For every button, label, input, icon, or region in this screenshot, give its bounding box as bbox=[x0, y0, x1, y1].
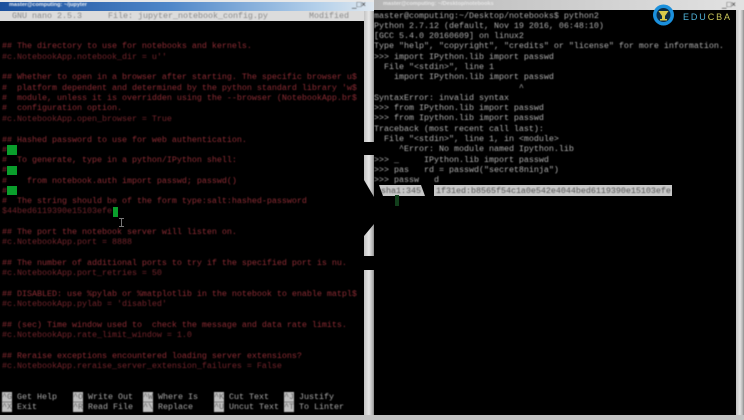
config file text: $44bed6119390e15103efe bbox=[2, 206, 112, 216]
config file text: ## Reraise exceptions encountered loading server extensions? bbox=[2, 351, 302, 361]
nano shortcut menu: ^U bbox=[214, 402, 224, 412]
python session text: import IPython.lib import passwd bbox=[394, 72, 554, 82]
panel: right terminal window bbox=[374, 0, 744, 415]
python session text: >>> import IPython.lib import passwd bbox=[374, 52, 554, 62]
nano shortcut menu: Get Help bbox=[17, 392, 57, 402]
nano shortcut menu: ^K bbox=[214, 392, 224, 402]
python session text: Type "help", "copyright", "credits" or "license" for more information. bbox=[374, 41, 724, 51]
config file text bbox=[2, 41, 358, 371]
python session text: File "<stdin>", line 1 bbox=[384, 62, 494, 72]
config file text: ## Whether to open in a browser after starting. The specific browser u$ bbox=[2, 72, 357, 82]
nano shortcut menu: Read File bbox=[88, 402, 133, 412]
config file text: ## DISABLED: use %pylab or %matplotlib in the notebook to enable matpl$ bbox=[2, 289, 357, 299]
python session text: master@computing:~/Desktop/notebooks$ python2 bbox=[374, 11, 599, 21]
highlighted password hash: sha1:345 1f31ed:b8565f54c1a0e542e4044bed6119390e15103efe bbox=[381, 186, 671, 196]
nano header bar: Modified bbox=[309, 11, 349, 21]
nano header bar bbox=[0, 11, 364, 21]
python session text: SyntaxError: invalid syntax bbox=[374, 93, 509, 103]
config file text: # The string should be of the form type:salt:hashed-password bbox=[2, 196, 307, 206]
config file text: #c.NotebookApp.rate_limit_window = 1.0 bbox=[2, 330, 192, 340]
nano shortcut menu: ^\ bbox=[143, 402, 153, 412]
python session text: File "<stdin>", line 1, in <module> bbox=[384, 134, 559, 144]
config file text: #c.NotebookApp.reraise_server_extension_failures = False bbox=[2, 361, 282, 371]
right title bar: _□× bbox=[722, 0, 736, 9]
nano shortcut menu: Justify bbox=[299, 392, 334, 402]
nano shortcut menu: Write Out bbox=[88, 392, 133, 402]
bottom window edge bbox=[0, 415, 744, 420]
nano shortcut menu: Exit bbox=[17, 402, 37, 412]
python session text: ^Error: No module named Ipython.lib bbox=[399, 144, 574, 154]
right title bar: master@computing: ~/Desktop/notebooks bbox=[383, 1, 494, 7]
python session text: ^ bbox=[519, 83, 524, 93]
config file text: # bbox=[2, 186, 7, 196]
nano shortcut menu: ^X bbox=[2, 402, 12, 412]
python session text: Python 2.7.12 (default, Nov 19 2016, 06:48:10) bbox=[374, 21, 604, 31]
left window scrollbar with arrow-shaped cut-outs bbox=[364, 11, 374, 415]
nano shortcut menu: ^O bbox=[73, 392, 83, 402]
config file text: # bbox=[2, 165, 7, 175]
nano shortcut menu: ^R bbox=[73, 402, 83, 412]
config file text: # bbox=[2, 145, 7, 155]
left title bar bbox=[0, 0, 374, 11]
config file text: # from notebook.auth import passwd; passwd() bbox=[2, 176, 237, 186]
nano shortcut menu bbox=[1, 391, 344, 413]
right window scrollbar bbox=[736, 10, 744, 415]
config file text: #c.NotebookApp.port_retries = 50 bbox=[2, 268, 162, 278]
logo: EDUCBA: EDUCBA bbox=[683, 12, 732, 22]
nano shortcut menu: ^J bbox=[284, 392, 294, 402]
icon: mouse I-beam bbox=[119, 218, 124, 227]
config file text: ## The number of additional ports to try if the specified port is nu. bbox=[2, 258, 347, 268]
config file text: ## The directory to use for notebooks and kernels. bbox=[2, 41, 252, 51]
nano header bar: File: jupyter_notebook_config.py bbox=[108, 11, 268, 21]
left title bar: master@computing: ~/jupyter bbox=[9, 2, 87, 8]
right title bar bbox=[374, 0, 744, 10]
nano shortcut menu: Uncut Text bbox=[229, 402, 279, 412]
nano shortcut menu: ^G bbox=[2, 392, 12, 402]
config file text: ## The port the notebook server will listen on. bbox=[2, 227, 237, 237]
nano shortcut menu: ^W bbox=[143, 392, 153, 402]
nano shortcut menu: Where Is bbox=[158, 392, 198, 402]
panel: left terminal window bbox=[0, 0, 374, 413]
config file text: #c.NotebookApp.pylab = 'disabled' bbox=[2, 299, 167, 309]
python cursor bbox=[395, 195, 399, 206]
nano shortcut menu: Cut Text bbox=[229, 392, 269, 402]
python session text: [GCC 5.4.0 20160609] on linux2 bbox=[374, 31, 524, 41]
green cursor blocks bbox=[7, 145, 118, 217]
config file text: #c.NotebookApp.notebook_dir = u'' bbox=[2, 52, 167, 62]
python session text: >>> from IPython.lib import passwd bbox=[374, 103, 544, 113]
left title bar: _□× bbox=[352, 0, 366, 9]
config file text: #c.NotebookApp.open_browser = True bbox=[2, 114, 172, 124]
python session text bbox=[374, 11, 724, 185]
config file text: # platform dependent and determined by the python standard library 'w$ bbox=[2, 83, 357, 93]
nano header bar: GNU nano 2.5.3 bbox=[12, 11, 82, 21]
python session text: >>> pas rd = passwd("secret8ninja") bbox=[374, 165, 559, 175]
python session text: >>> from Ipython.lib import passwd bbox=[374, 113, 544, 123]
config file text: ## Hashed password to use for web authentication. bbox=[2, 135, 247, 145]
nano shortcut menu: To Linter bbox=[299, 402, 344, 412]
logo: EDUCBA bbox=[653, 4, 732, 26]
config file text: # module, unless it is overridden using the --browser (NotebookApp.br$ bbox=[2, 93, 357, 103]
config file text: ## (sec) Time window used to check the message and data rate limits. bbox=[2, 320, 347, 330]
python session text: >>> _ IPython.lib import passwd bbox=[374, 155, 549, 165]
config file text: #c.NotebookApp.port = 8888 bbox=[2, 237, 132, 247]
nano shortcut menu: ^T bbox=[284, 402, 294, 412]
config file text: # configuration option. bbox=[2, 103, 122, 113]
nano shortcut menu: Replace bbox=[158, 402, 193, 412]
python session text: >>> passw d bbox=[374, 175, 439, 185]
config file text: # To generate, type in a python/IPython shell: bbox=[2, 155, 237, 165]
python session text: Traceback (most recent call last): bbox=[374, 124, 544, 134]
